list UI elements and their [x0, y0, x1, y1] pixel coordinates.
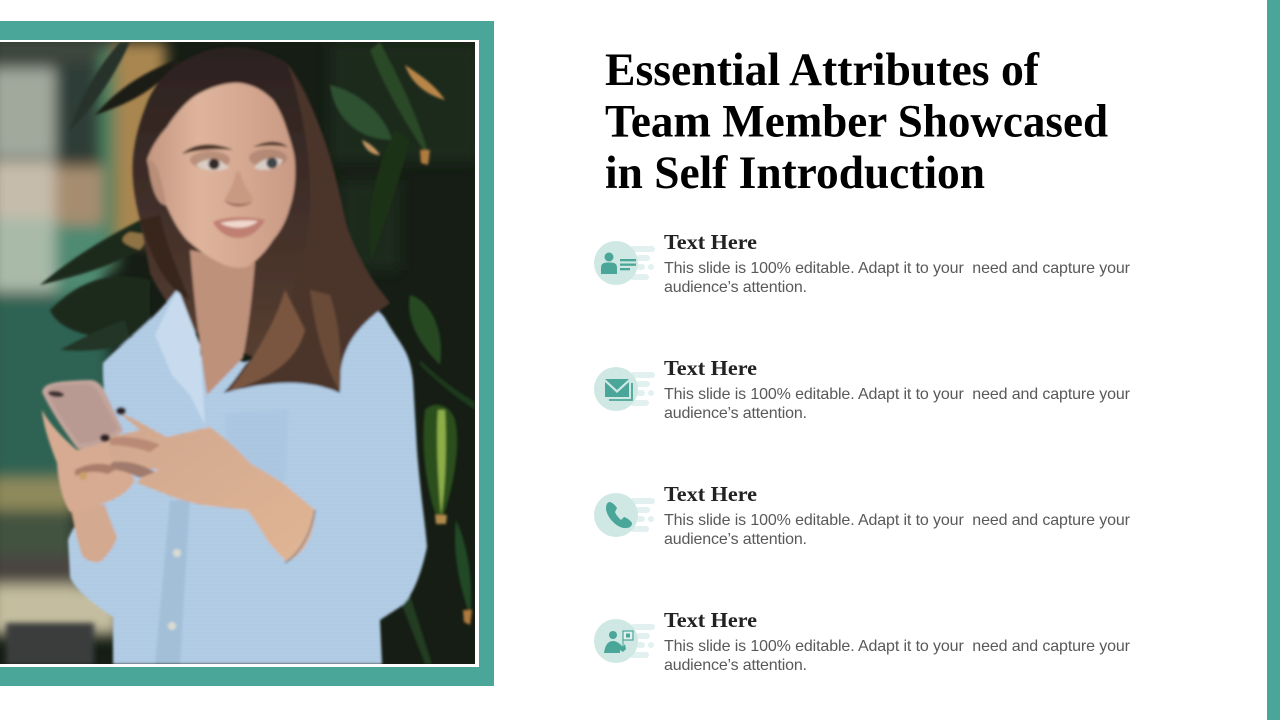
icon: person with text lines	[594, 241, 655, 285]
item 3 description	[664, 512, 1131, 548]
ear	[148, 160, 166, 205]
shirt body	[68, 288, 427, 664]
item 2 description: This slide is 100% editable. Adapt it to your need and capture your	[664, 386, 1131, 403]
eye shadow	[190, 151, 230, 169]
item 3 description: This slide is 100% editable. Adapt it to your need and capture your	[664, 512, 1131, 529]
face	[147, 83, 295, 268]
item 2: email	[594, 356, 1131, 422]
left hand	[42, 410, 135, 512]
title: Team Member Showcased	[605, 96, 1108, 148]
white inner border	[0, 40, 479, 667]
nose	[224, 172, 252, 206]
phone	[42, 380, 123, 449]
item 3 heading: Text Here	[664, 482, 757, 506]
neck	[190, 250, 255, 395]
item 2 description: audience’s attention.	[664, 405, 807, 422]
right edge bar	[1267, 0, 1280, 720]
left leaves	[95, 58, 180, 115]
item 4 description	[664, 638, 1131, 674]
eyes	[196, 159, 229, 171]
office box at lower left	[6, 623, 94, 665]
item 3: phone	[594, 482, 1131, 548]
teal frame	[0, 21, 494, 686]
item 1 description: This slide is 100% editable. Adapt it to your need and capture your	[664, 260, 1131, 277]
item 2 heading: Text Here	[664, 356, 757, 380]
item 4 description: audience’s attention.	[664, 657, 807, 674]
title: Essential Attributes of	[605, 44, 1040, 96]
photo: woman holding phone	[0, 35, 480, 665]
photo panel with teal frame	[0, 21, 494, 686]
title: in Self Introduction	[605, 147, 985, 199]
left forearm	[70, 505, 117, 562]
placket and collar	[155, 500, 190, 664]
pocket	[225, 410, 288, 480]
item 4 heading: Text Here	[664, 608, 757, 632]
item 4 description: This slide is 100% editable. Adapt it to your need and capture your	[664, 638, 1131, 655]
icon: envelope	[594, 367, 655, 411]
brows	[182, 144, 233, 154]
item 1: profile	[594, 230, 1131, 296]
item 1 description: audience’s attention.	[664, 279, 807, 296]
right foliage	[330, 85, 392, 140]
title	[605, 44, 1108, 199]
icon: telephone handset	[594, 493, 655, 537]
icon: person with sign	[594, 619, 655, 663]
item 4: presenter	[594, 608, 1131, 674]
item 2 description	[664, 386, 1131, 422]
item 3 description: audience’s attention.	[664, 531, 807, 548]
hair back	[130, 46, 312, 358]
sleeve fold line	[285, 510, 315, 563]
item 1 heading: Text Here	[664, 230, 757, 254]
item 1 description	[664, 260, 1131, 296]
right hand and forearm	[108, 412, 315, 562]
mouth	[213, 217, 265, 238]
front hair strands	[223, 63, 390, 393]
